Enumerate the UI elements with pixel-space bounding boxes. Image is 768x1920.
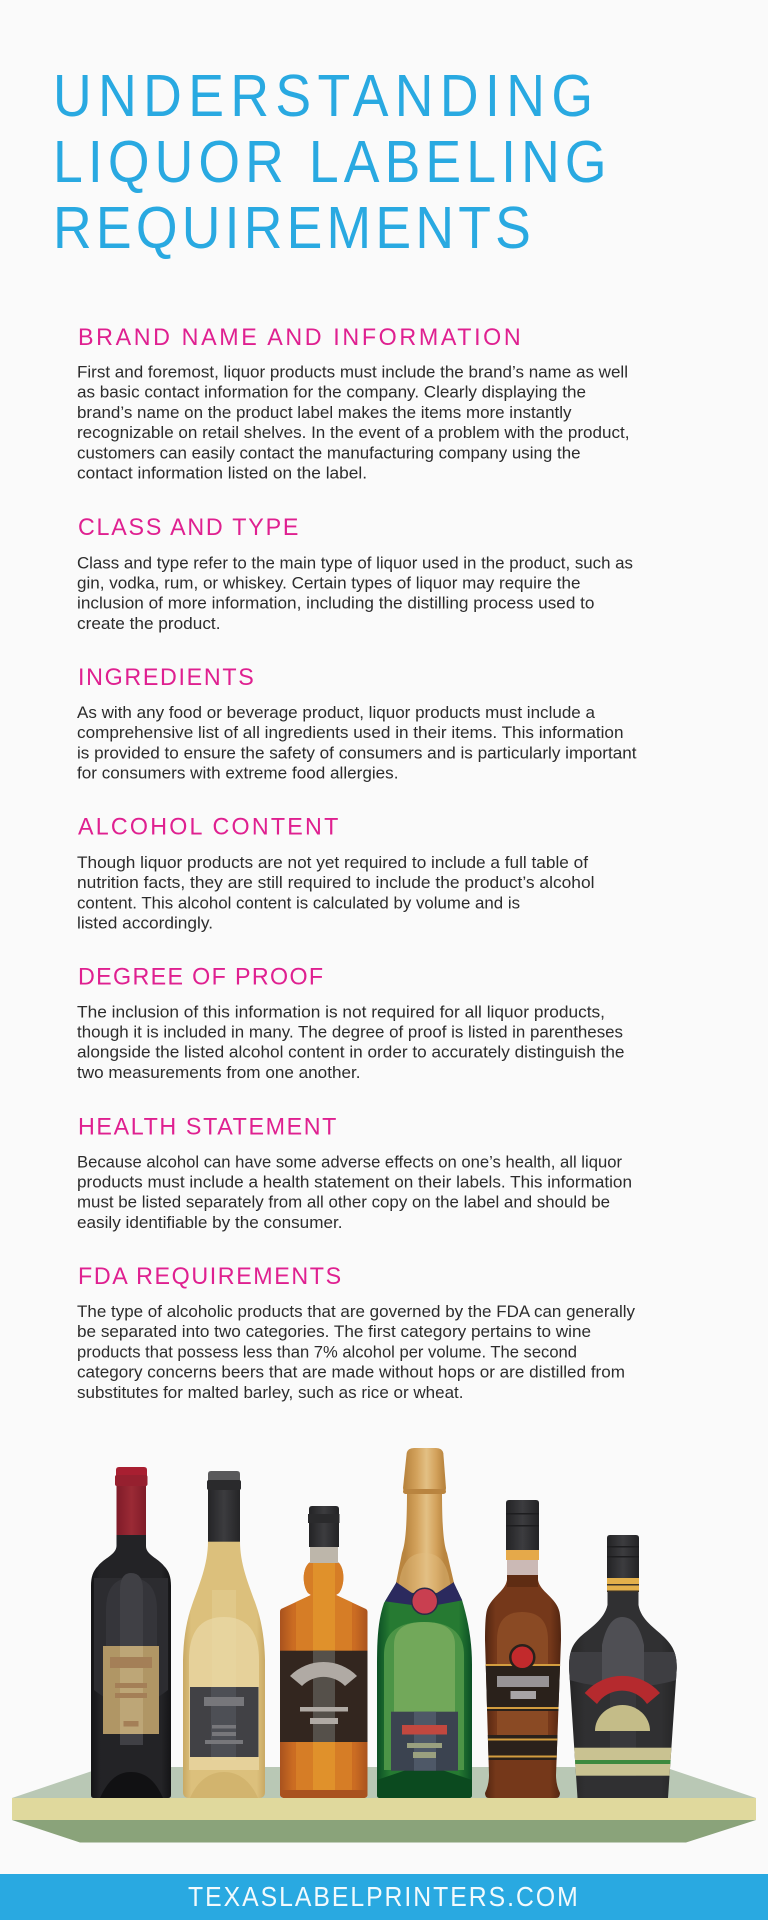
text block: as basic contact information for the company. Clearly displaying the bbox=[77, 383, 586, 402]
footer bar bbox=[0, 1874, 768, 1920]
text block: products that possess less than 7% alcohol per volume. The second bbox=[77, 1342, 577, 1361]
text block: alongside the listed alcohol content in order to accurately distinguish the bbox=[77, 1043, 624, 1062]
title: LIQUOR LABELING bbox=[53, 128, 607, 195]
title: UNDERSTANDING bbox=[53, 62, 593, 129]
text block: comprehensive list of all ingredients used in their items. This information bbox=[77, 723, 624, 742]
title bbox=[53, 62, 606, 261]
text block: Because alcohol can have some adverse effects on one’s health, all liquor bbox=[77, 1152, 622, 1171]
heading: INGREDIENTS bbox=[78, 663, 254, 691]
text block: substitutes for malted barley, such as rice or wheat. bbox=[77, 1383, 464, 1402]
panel: ingredients bbox=[77, 663, 637, 783]
text block: brand’s name on the product label makes the items more instantly bbox=[77, 403, 572, 422]
heading: ALCOHOL CONTENT bbox=[78, 813, 339, 841]
icon: red wine bottle bbox=[91, 1467, 171, 1798]
text block: listed accordingly. bbox=[77, 914, 213, 933]
text block: The type of alcoholic products that are governed by the FDA can generally bbox=[77, 1302, 635, 1321]
website url: TEXASLABELPRINTERS.COM bbox=[188, 1881, 578, 1912]
panel: fda requirements bbox=[77, 1262, 635, 1402]
icon: white wine bottle bbox=[183, 1471, 265, 1798]
text block: nutrition facts, they are still required to include the product’s alcohol bbox=[77, 873, 594, 892]
text block: content. This alcohol content is calculated by volume and is bbox=[77, 893, 520, 912]
panel: brand name and information bbox=[77, 323, 630, 482]
text block: Though liquor products are not yet required to include a full table of bbox=[77, 853, 588, 872]
text block: for consumers with extreme food allergies. bbox=[77, 764, 398, 783]
heading: FDA REQUIREMENTS bbox=[78, 1262, 341, 1290]
text block bbox=[77, 1302, 635, 1402]
text block: is provided to ensure the safety of consumers and is particularly important bbox=[77, 743, 637, 762]
heading: HEALTH STATEMENT bbox=[78, 1113, 337, 1140]
text block bbox=[77, 703, 637, 783]
text block: category concerns beers that are made without hops or are distilled from bbox=[77, 1363, 625, 1382]
icon: rum bottle bbox=[484, 1500, 562, 1798]
icon: cream liqueur bottle bbox=[569, 1535, 677, 1798]
text block: As with any food or beverage product, liquor products must include a bbox=[77, 703, 596, 722]
heading: DEGREE OF PROOF bbox=[78, 963, 323, 990]
text block bbox=[77, 362, 630, 482]
text block bbox=[77, 1002, 624, 1082]
panel: alcohol content bbox=[77, 813, 594, 933]
text block: recognizable on retail shelves. In the event of a problem with the product, bbox=[77, 423, 630, 442]
text block: The inclusion of this information is not required for all liquor products, bbox=[77, 1002, 605, 1021]
text block: gin, vodka, rum, or whiskey. Certain types of liquor may require the bbox=[77, 574, 580, 592]
text block: must be listed separately from all other copy on the label and should be bbox=[77, 1193, 610, 1212]
panel: class and type bbox=[77, 513, 633, 633]
text block: two measurements from one another. bbox=[77, 1063, 360, 1082]
text block bbox=[77, 1152, 632, 1232]
text block: though it is included in many. The degree of proof is listed in parentheses bbox=[77, 1022, 623, 1042]
icon: champagne bottle bbox=[375, 1448, 475, 1798]
text block: customers can easily contact the manufacturing company using the bbox=[77, 443, 580, 462]
text block: products must include a health statement on their labels. This information bbox=[77, 1172, 632, 1192]
text block: contact information listed on the label. bbox=[77, 464, 367, 482]
text block bbox=[77, 553, 633, 633]
shelf bbox=[12, 1767, 756, 1842]
heading: CLASS AND TYPE bbox=[78, 513, 298, 541]
text block: First and foremost, liquor products must include the brand’s name as well bbox=[77, 362, 628, 382]
panel: degree of proof bbox=[77, 963, 624, 1082]
icon: whiskey bottle bbox=[280, 1506, 368, 1798]
text block: Class and type refer to the main type of liquor used in the product, such as bbox=[77, 553, 633, 572]
text block: easily identifiable by the consumer. bbox=[77, 1213, 342, 1232]
text block bbox=[77, 853, 594, 933]
text block: create the product. bbox=[77, 614, 220, 633]
panel: health statement bbox=[77, 1113, 632, 1232]
text block: inclusion of more information, including the distilling process used to bbox=[77, 594, 594, 613]
heading: BRAND NAME AND INFORMATION bbox=[78, 323, 521, 351]
text block: be separated into two categories. The first category pertains to wine bbox=[77, 1322, 591, 1341]
title: REQUIREMENTS bbox=[53, 194, 531, 261]
